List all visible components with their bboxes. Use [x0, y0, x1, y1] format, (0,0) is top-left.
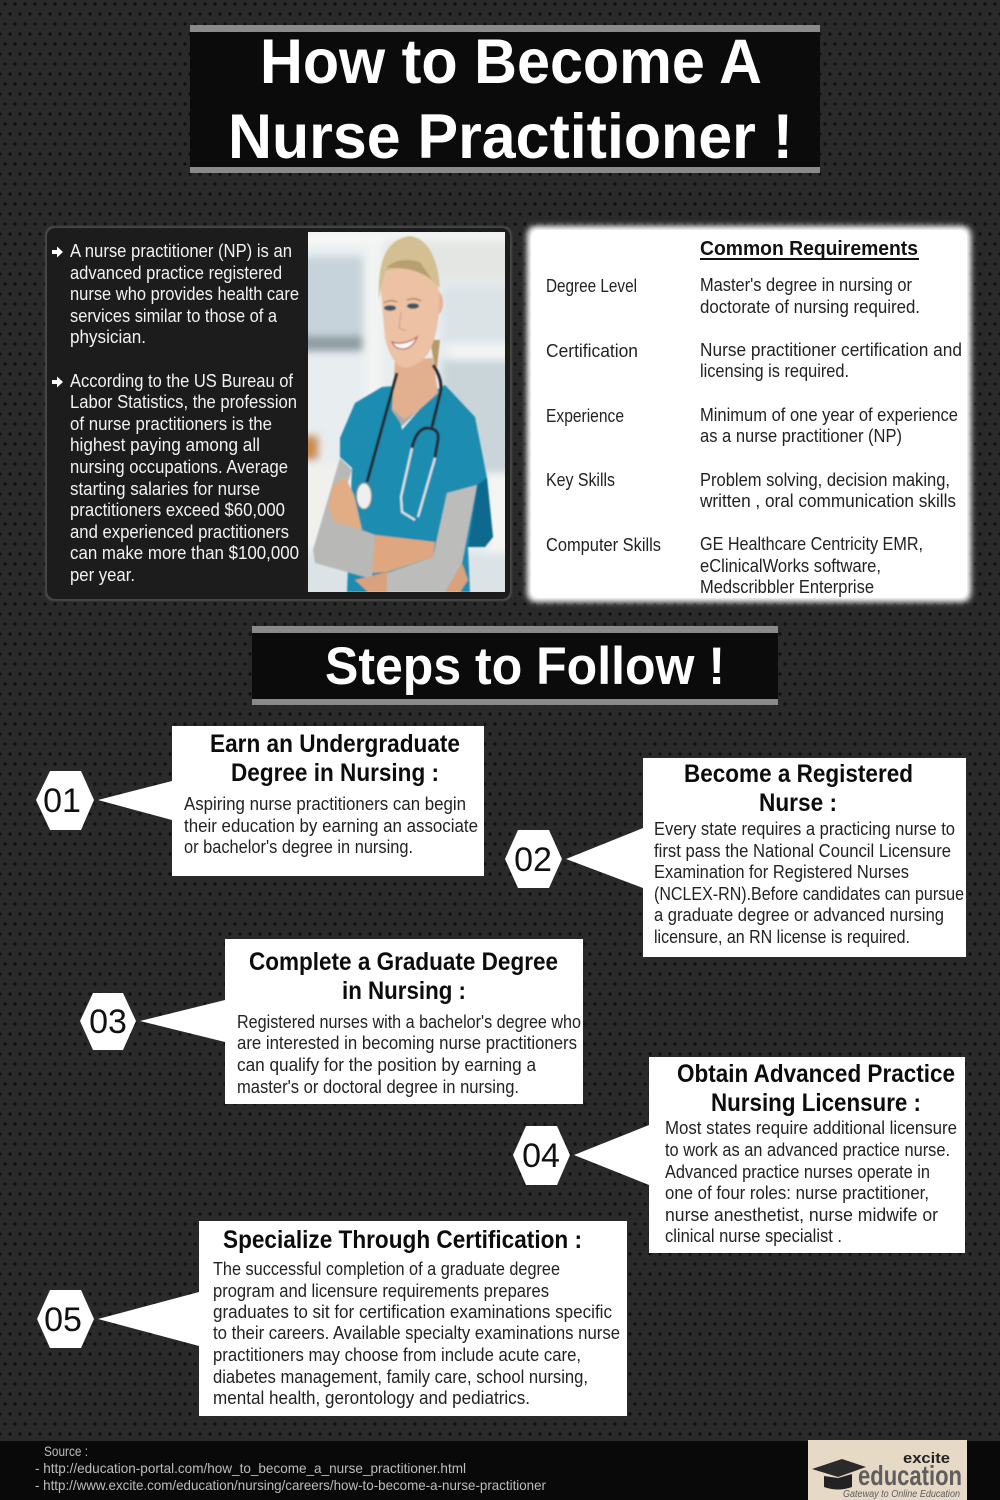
body 05: mental health, gerontology and pediatrics. — [213, 1388, 530, 1408]
heading 01: Earn an Undergraduate — [210, 730, 460, 758]
body 05: diabetes management, family care, school nursing, — [213, 1367, 588, 1387]
row: computer skills: GE Healthcare Centricity EMR, — [700, 534, 923, 554]
row: key skills: written , oral communication skills — [699, 491, 956, 511]
text block: salaries: practitioners exceed $60,000 — [70, 500, 285, 520]
callout card 05 — [98, 1221, 627, 1416]
body 04: nurse anesthetist, nurse midwife or — [665, 1205, 938, 1225]
body 01 — [184, 794, 478, 857]
text block: definition: A nurse practitioner (NP) is an — [70, 241, 292, 261]
step 03 — [80, 939, 583, 1104]
icon: hexagon 03 — [80, 993, 136, 1050]
row: experience: Minimum of one year of experience — [700, 405, 958, 425]
stethoscope tubes — [367, 365, 441, 482]
heading 04: Nursing Licensure : — [711, 1089, 921, 1117]
table heading: Common Requirements — [700, 238, 918, 260]
body 01: their education by earning an associate — [184, 816, 478, 836]
body 04: Most states require additional licensure — [665, 1118, 957, 1138]
text block: salaries: per year. — [70, 565, 135, 585]
steps banner — [252, 626, 778, 705]
panel: introduction — [45, 226, 515, 601]
text block: salaries: can make more than $100,000 — [70, 543, 299, 563]
step 02 — [505, 758, 966, 957]
steps heading: Steps to Follow ! — [325, 637, 725, 696]
logo: excite education: excite — [903, 1450, 950, 1467]
heading 04: Obtain Advanced Practice — [677, 1060, 955, 1088]
ponytail — [430, 340, 440, 375]
text block: definition — [70, 241, 299, 347]
row: certification: Nurse practitioner certification and — [700, 340, 962, 360]
row: key skills — [546, 470, 956, 511]
icon: bullet arrow — [52, 376, 63, 388]
step 04 — [513, 1057, 965, 1253]
callout card 01 — [98, 726, 484, 876]
text block: salaries: starting salaries for nurse — [70, 479, 260, 499]
forearm — [372, 535, 435, 573]
body 02: Examination for Registered Nurses — [654, 862, 909, 882]
source list: Source : — [44, 1443, 88, 1459]
heading 05: Specialize Through Certification : — [223, 1226, 582, 1254]
icon: hexagon 03: 03 — [89, 1003, 127, 1041]
text block: definition: physician. — [70, 327, 146, 347]
heading 02 — [684, 760, 913, 817]
panel: common requirements — [527, 226, 971, 602]
body 05: graduates to sit for certification examinations specific — [213, 1302, 612, 1322]
eyes — [384, 305, 396, 311]
source list: - http://education-portal.com/how_to_become_a_nurse_practitioner.html — [35, 1460, 466, 1476]
body 02: licensure, an RN license is required. — [654, 927, 910, 947]
icon: hexagon 01: 01 — [43, 782, 81, 820]
footer — [0, 1440, 1000, 1500]
title banner — [190, 25, 820, 173]
icon: hexagon 02 — [505, 830, 562, 888]
body 02: Every state requires a practicing nurse to — [654, 819, 955, 839]
body 05: program and licensure requirements prepares — [213, 1281, 549, 1301]
title text: How to Become A — [260, 27, 762, 97]
text block: salaries: and experienced practitioners — [70, 522, 289, 542]
text block: salaries: Labor Statistics, the profession — [70, 392, 297, 412]
hair — [379, 236, 440, 300]
body 04 — [665, 1118, 957, 1246]
callout card 04 — [574, 1057, 965, 1253]
row: certification: licensing is required. — [700, 361, 849, 381]
row: degree level: Master's degree in nursing or — [700, 275, 912, 295]
body 04: to work as an advanced practice nurse. — [665, 1140, 950, 1160]
neck — [392, 358, 438, 425]
row: experience — [546, 405, 958, 446]
body 01: or bachelor's degree in nursing. — [184, 837, 413, 857]
row: computer skills: Computer Skills — [546, 535, 661, 555]
body 03: master's or doctoral degree in nursing. — [237, 1077, 519, 1097]
icon: hexagon 04 — [513, 1126, 570, 1185]
row: computer skills: Medscribbler Enterprise — [700, 577, 874, 597]
mouth — [392, 337, 417, 349]
left arm — [313, 458, 375, 579]
face — [381, 264, 439, 367]
row: experience: as a nurse practitioner (NP) — [700, 426, 902, 446]
icon: hexagon 02: 02 — [514, 841, 552, 879]
heading 03 — [249, 948, 558, 1005]
ear — [438, 292, 444, 314]
source list: - http://www.excite.com/education/nursing/careers/how-to-become-a-nurse-practitioner — [35, 1477, 546, 1493]
row: key skills: Key Skills — [546, 470, 615, 490]
body 03: are interested in becoming nurse practitioners — [237, 1033, 577, 1053]
heading 03: in Nursing : — [342, 977, 466, 1005]
body 02: first pass the National Council Licensure — [654, 841, 951, 861]
text block: salaries: According to the US Bureau of — [70, 371, 294, 391]
icon: hexagon 05 — [37, 1290, 94, 1348]
body 04: Advanced practice nurses operate in — [665, 1162, 930, 1182]
icon: hexagon 05: 05 — [44, 1301, 82, 1339]
body 03: Registered nurses with a bachelor's degree who — [237, 1012, 581, 1032]
text block: definition: nurse who provides health care — [70, 284, 299, 304]
right arm — [387, 485, 477, 592]
row: certification: Certification — [546, 341, 638, 361]
body 02 — [654, 819, 964, 947]
heading 01: Degree in Nursing : — [231, 759, 439, 787]
text block: definition: services similar to those of a — [70, 306, 278, 326]
body 05: The successful completion of a graduate degree — [213, 1259, 560, 1279]
logo: excite education — [808, 1440, 967, 1500]
body 04: clinical nurse specialist . — [665, 1226, 842, 1246]
scrubs — [340, 385, 493, 592]
icon: hexagon 01 — [36, 771, 94, 830]
row: degree level: Degree Level — [546, 276, 637, 296]
step 01 — [36, 726, 484, 876]
heading 04 — [677, 1060, 955, 1117]
logo: excite education: education — [858, 1460, 962, 1491]
text block: salaries: highest paying among all — [70, 435, 260, 455]
body 03 — [237, 1012, 581, 1097]
body 02: (NCLEX-RN).Before candidates can pursue — [654, 884, 964, 904]
heading 02: Become a Registered — [684, 760, 913, 788]
row: key skills: Problem solving, decision making, — [700, 470, 950, 490]
body 02: a graduate degree or advanced nursing — [654, 905, 944, 925]
body 03: can qualify for the position by earning a — [237, 1055, 537, 1075]
text block: definition: advanced practice registered — [70, 263, 282, 283]
row: computer skills — [546, 534, 923, 597]
row: certification — [546, 340, 962, 381]
photo: nurse with stethoscope — [300, 232, 515, 598]
callout card 03 — [140, 939, 583, 1104]
source list — [35, 1443, 546, 1493]
body 05 — [213, 1259, 620, 1408]
heading 01 — [210, 730, 460, 787]
body 05: to their careers. Available specialty examinations nurse — [213, 1323, 620, 1343]
text block: salaries: of nurse practitioners is the — [70, 414, 272, 434]
title text — [228, 27, 793, 172]
row: degree level: doctorate of nursing required. — [700, 297, 920, 317]
row: computer skills: eClinicalWorks software, — [700, 556, 881, 576]
text block: salaries — [70, 371, 299, 585]
icon: hexagon 04: 04 — [522, 1137, 560, 1175]
body 05: practitioners may choose from include acute care, — [213, 1345, 581, 1365]
body 01: Aspiring nurse practitioners can begin — [184, 794, 466, 814]
callout card 02 — [566, 758, 966, 957]
icon: bullet arrow — [52, 246, 63, 258]
text block: salaries: nursing occupations. Average — [70, 457, 288, 477]
lower hand — [355, 572, 387, 592]
heading 03: Complete a Graduate Degree — [249, 948, 558, 976]
logo: excite education: Gateway to Online Education — [843, 1489, 960, 1500]
body 04: one of four roles: nurse practitioner, — [665, 1183, 929, 1203]
step 05 — [37, 1221, 627, 1416]
heading 02: Nurse : — [759, 789, 837, 817]
title text: Nurse Practitioner ! — [228, 102, 793, 172]
row: experience: Experience — [546, 406, 624, 426]
row: degree level — [546, 275, 920, 317]
left hand — [328, 477, 362, 530]
